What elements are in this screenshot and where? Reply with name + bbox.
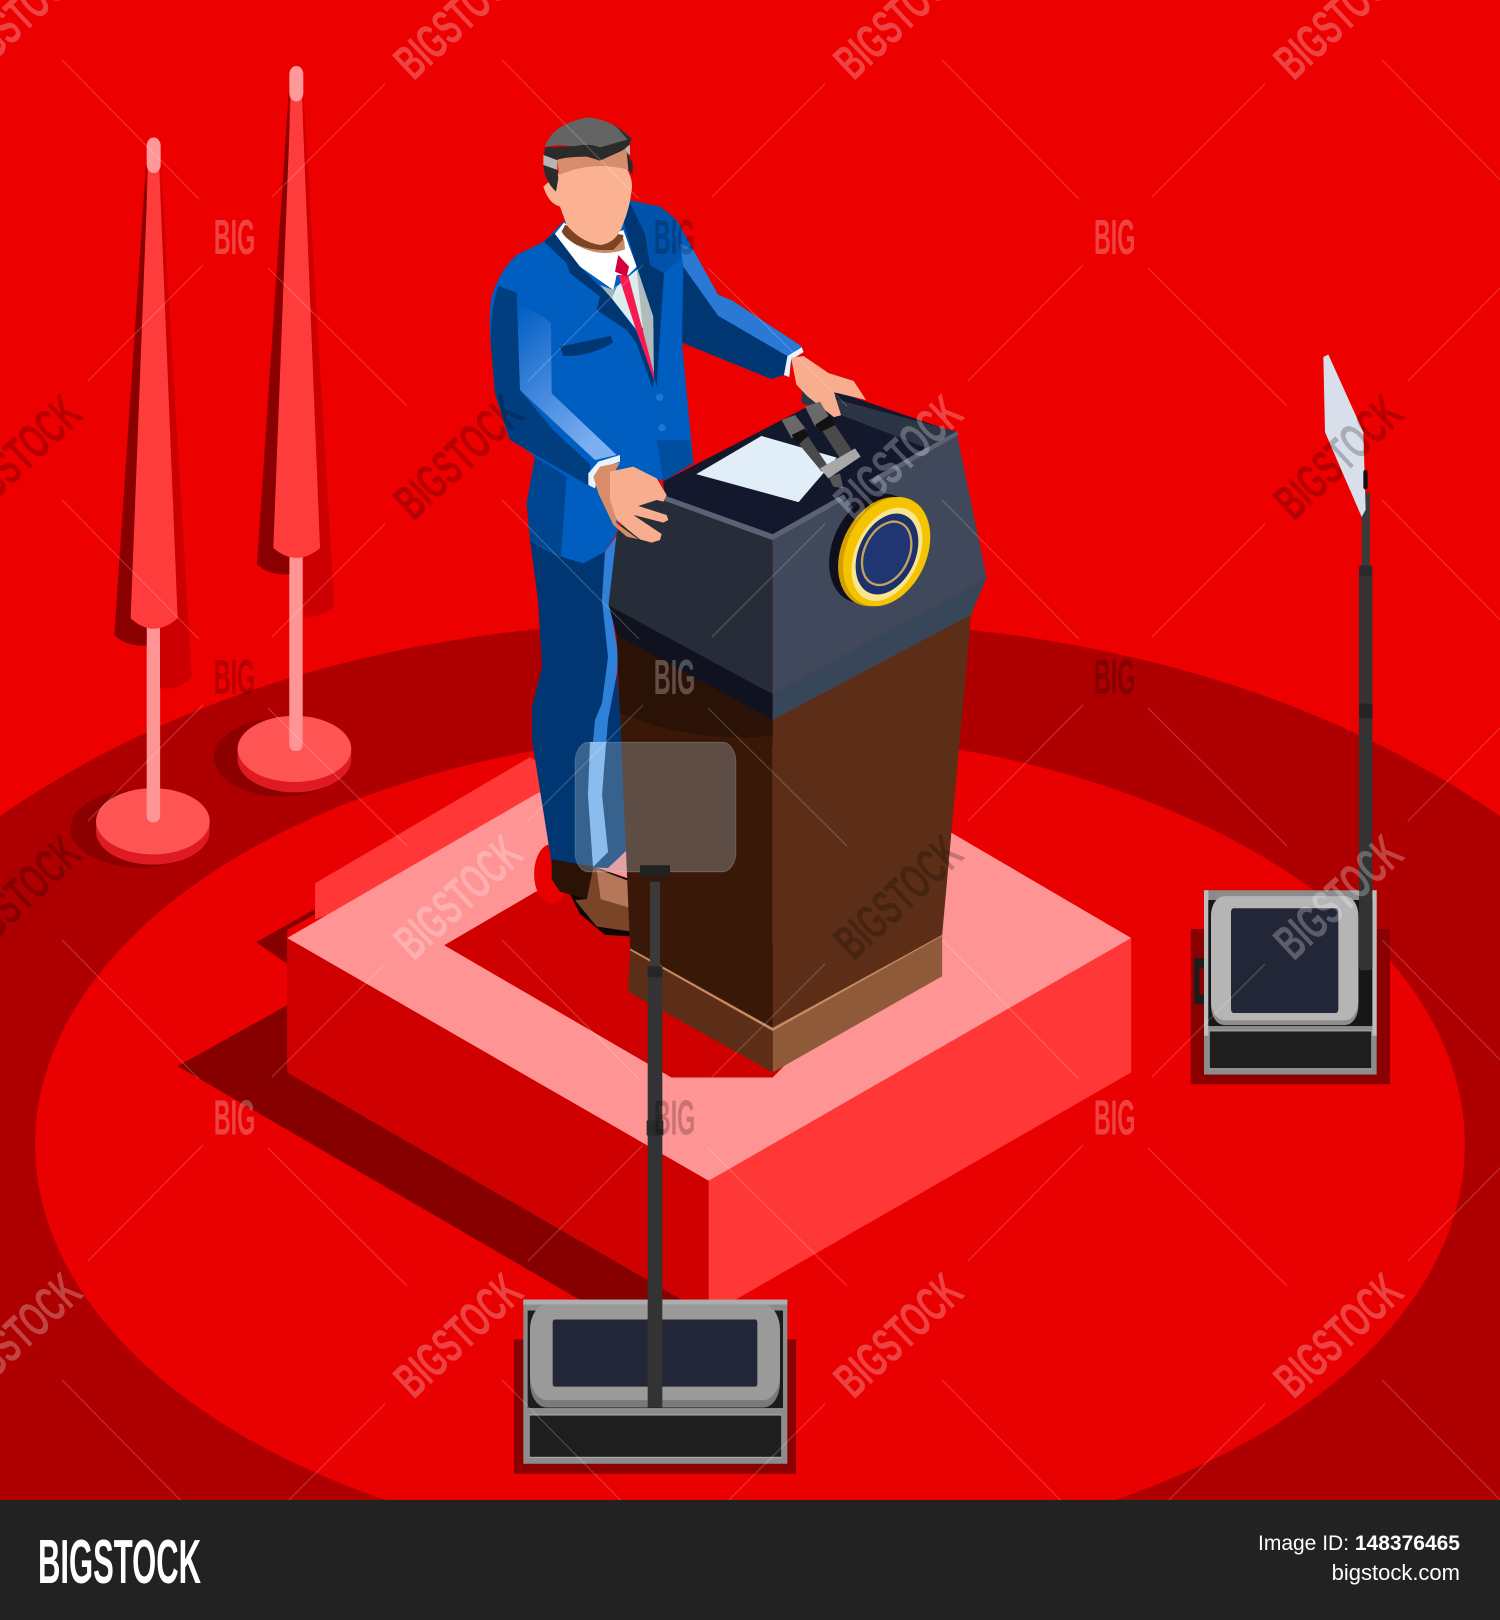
case shadow (1191, 929, 1390, 1084)
watermark text: BIG (1094, 1089, 1135, 1145)
foot shadow (534, 844, 569, 904)
footer logo: BIGSTOCK (38, 1528, 201, 1597)
teleprompter: front (514, 742, 796, 1474)
stand pole (640, 865, 670, 1408)
inner recess (444, 868, 826, 1077)
shaded left sleeve (491, 286, 590, 487)
lower panel (529, 1415, 782, 1457)
footer bar (0, 1500, 1500, 1620)
watermark text: BIGSTOCK (1263, 1262, 1413, 1408)
lit right sleeve (680, 243, 802, 356)
mic mount shadow (830, 467, 887, 517)
case frame (1204, 890, 1377, 1075)
brown body (617, 615, 971, 1028)
pocket (560, 336, 613, 356)
podium back wall and microphones and seal (802, 390, 957, 621)
image id: Image ID: 148376465 (1258, 1532, 1460, 1555)
watermark text: BIG (214, 649, 255, 705)
seal emblem (812, 479, 947, 621)
right lapel (623, 200, 664, 387)
right hand (791, 356, 866, 417)
jacket lower shade (527, 457, 567, 557)
inner floor ellipse (35, 731, 1465, 1558)
buttons (656, 394, 666, 431)
monitor (1211, 900, 1358, 1025)
lamp: left (70, 138, 211, 868)
top hair (544, 117, 632, 161)
mirror clip (1363, 470, 1368, 489)
watermark text: BIGSTOCK (823, 824, 973, 970)
shaded right sleeve (682, 267, 787, 379)
watermark text: BIGSTOCK (1263, 384, 1413, 530)
right face (709, 938, 1131, 1315)
left cuff (588, 455, 620, 488)
shirt shade (600, 267, 654, 377)
reflective mirror (1323, 355, 1366, 517)
watermark text: BIGSTOCK (383, 1262, 533, 1408)
watermark text: BIG (1094, 649, 1135, 705)
watermark text: BIG (654, 1089, 695, 1145)
slab faces (608, 433, 987, 694)
watermark text: BIG (654, 209, 695, 265)
tie (615, 255, 654, 380)
stand pole (1359, 493, 1372, 970)
face (543, 165, 632, 245)
back wall (802, 390, 957, 447)
neck (562, 225, 623, 250)
lit left sleeve (517, 307, 617, 460)
stage platform (178, 723, 1131, 1343)
trousers (530, 535, 627, 868)
back riser (315, 757, 579, 919)
wooden base (628, 932, 942, 1072)
slab edge highlight (643, 431, 959, 540)
right cuff (784, 347, 804, 377)
slab lip (608, 577, 987, 720)
shirt (554, 223, 637, 290)
watermark text: BIG (214, 1089, 255, 1145)
left hand (593, 463, 668, 543)
monitor (530, 1307, 780, 1408)
case shadow (514, 1339, 796, 1474)
watermark text: BIG (1094, 209, 1135, 265)
watermark text: BIGSTOCK (823, 384, 973, 530)
jacket body (490, 200, 802, 563)
watermark text: BIGSTOCK (823, 1262, 973, 1408)
jacket right panel shade (657, 440, 693, 482)
lamp: right (214, 66, 351, 796)
podium (588, 347, 987, 1072)
monitor screen (1231, 908, 1338, 1013)
speaker figure (490, 117, 802, 936)
platform shadow (178, 1005, 723, 1343)
microphones (782, 402, 861, 488)
shoes (552, 859, 631, 936)
dark outer ring (0, 620, 1500, 1500)
paper sheet (696, 436, 837, 502)
case handle (1194, 958, 1204, 1004)
left face (287, 938, 709, 1315)
shoulder shade (628, 200, 683, 273)
watermark text: BIGSTOCK (1263, 824, 1413, 970)
monitor screen (553, 1319, 757, 1387)
watermark text: BIG (654, 649, 695, 705)
scene floor rings (0, 620, 1500, 1558)
forehead shade (557, 143, 629, 175)
top surface (287, 723, 1131, 1181)
slab top (663, 392, 957, 536)
hands and cuffs (588, 347, 866, 543)
watermark text: BIGSTOCK (383, 824, 533, 970)
watermark text: BIGSTOCK (383, 384, 533, 530)
neck highlight (577, 238, 625, 253)
lower panel (1209, 1031, 1372, 1069)
site url: bigstock.com (1332, 1560, 1460, 1585)
case frame (523, 1300, 787, 1464)
watermark text: BIG (214, 209, 255, 265)
side hair (543, 145, 633, 192)
teleprompter: right (1191, 355, 1390, 1084)
left lapel (544, 233, 654, 388)
glass panel (575, 742, 736, 872)
jacket and head (490, 117, 802, 563)
